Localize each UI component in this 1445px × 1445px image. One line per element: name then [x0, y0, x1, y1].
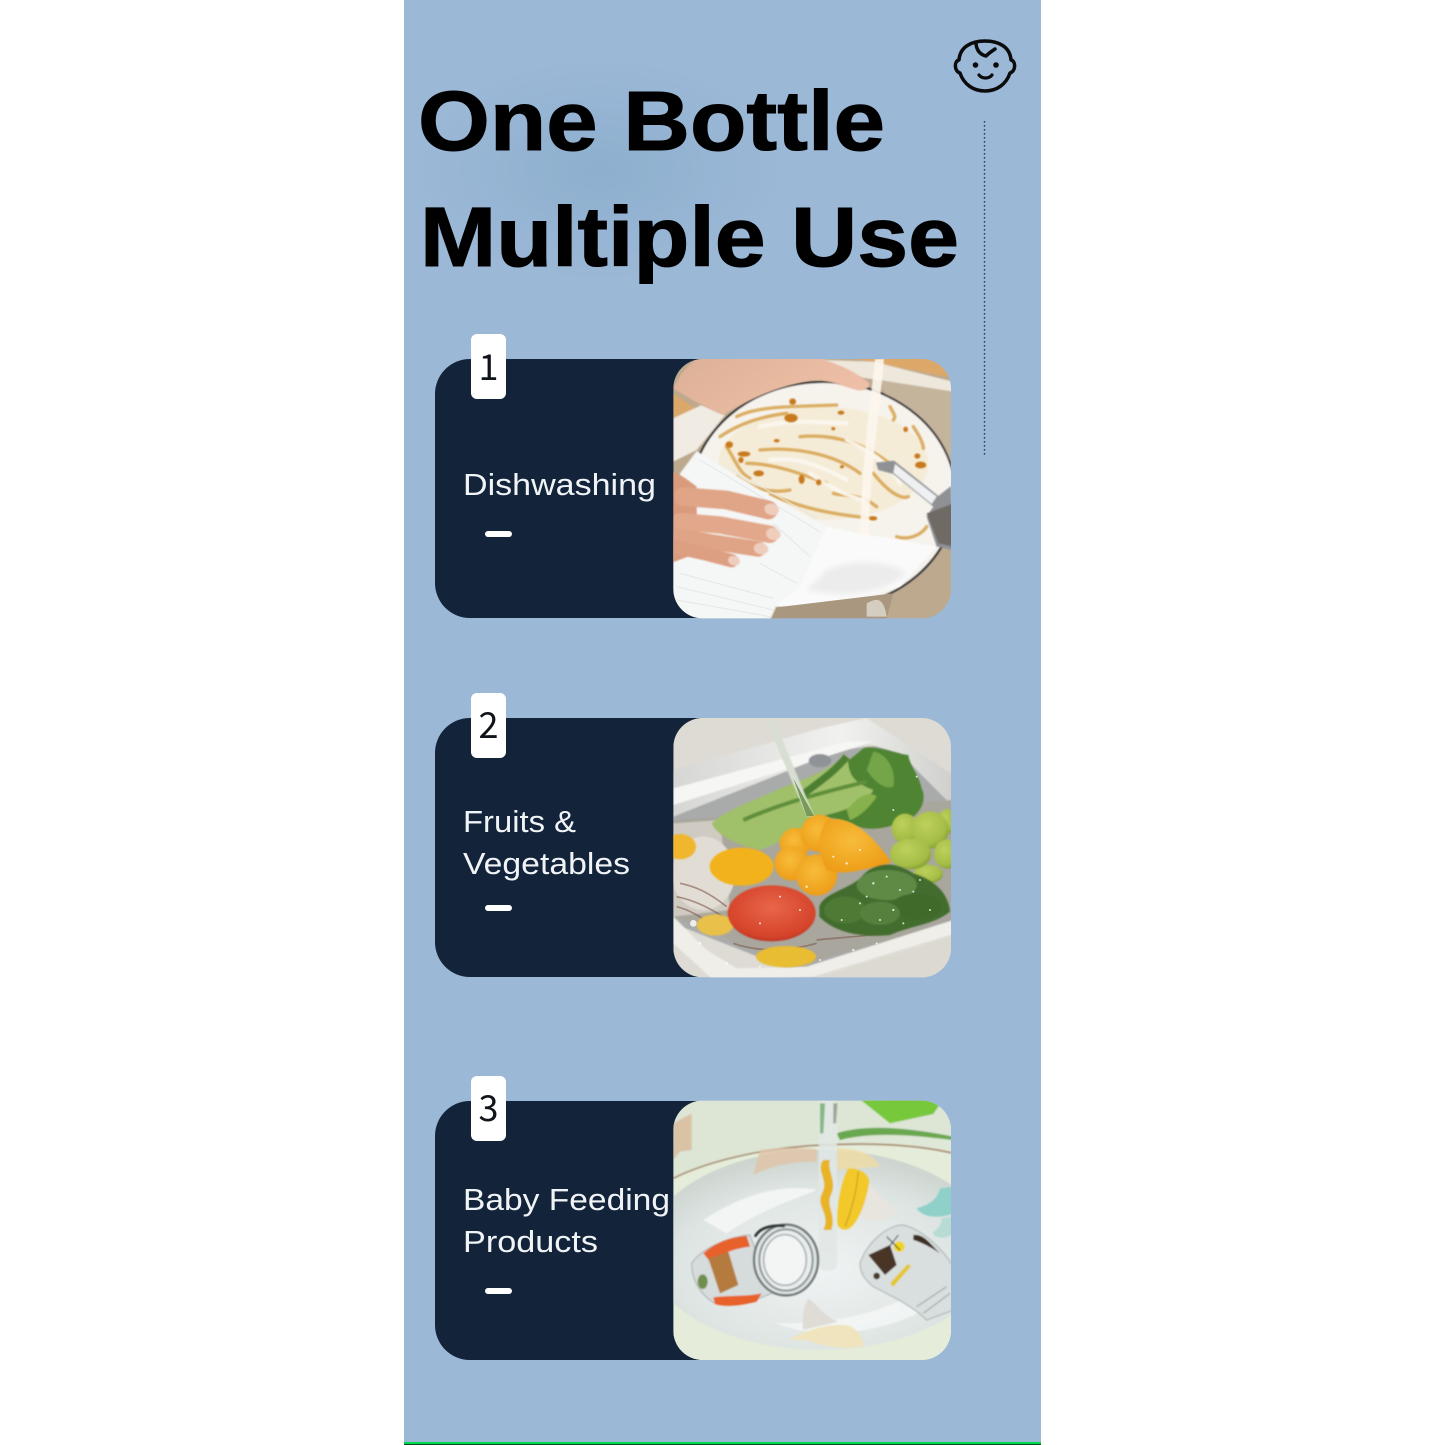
card background: [435, 359, 700, 618]
label: Fruits &: [463, 804, 576, 839]
cloth: [670, 451, 827, 620]
label: [463, 1182, 670, 1259]
badge number 1: [471, 334, 506, 399]
badge number 3: 3: [479, 1080, 498, 1132]
yellow funnel nipple: [837, 1168, 898, 1230]
nipple and cream ring: [791, 1298, 863, 1348]
panel: baby feeding products: [435, 1076, 993, 1360]
title: Multiple Use: [420, 190, 959, 284]
pacifier: [917, 1187, 953, 1238]
lower hand: [670, 471, 782, 567]
badge number 1: 1: [479, 339, 498, 391]
water stream: [819, 1101, 837, 1271]
dotted vertical line: [984, 121, 986, 456]
faucet: [876, 461, 953, 550]
dash: [485, 1288, 512, 1294]
panel: fruits and vegetables: [435, 693, 961, 980]
page background panel: [404, 0, 1041, 1445]
hand on top: [673, 357, 869, 415]
label: [463, 804, 630, 881]
photo: bottles in basin: [673, 1100, 951, 1360]
label: Products: [463, 1224, 598, 1259]
label: Baby Feeding: [463, 1182, 670, 1217]
photo: produce in sink: [664, 718, 961, 980]
card background: [435, 1101, 700, 1360]
label: Dishwashing: [463, 467, 656, 502]
water stream: [860, 359, 884, 537]
badge number 2: 2: [479, 697, 498, 749]
photo: washing a plate: [670, 357, 956, 620]
badge number 3: [471, 1076, 506, 1141]
badge number 2: [471, 693, 506, 758]
panel: dishwashing: [435, 334, 956, 620]
icon: baby face: [955, 41, 1015, 91]
card background: [435, 718, 700, 977]
label: Vegetables: [463, 846, 630, 881]
dash: [485, 531, 512, 537]
title: [418, 74, 959, 284]
feeding bottle with orange print: [692, 1225, 818, 1306]
title: One Bottle: [418, 74, 885, 168]
feeding bottle with bear print: [860, 1225, 953, 1320]
dash: [485, 905, 512, 911]
